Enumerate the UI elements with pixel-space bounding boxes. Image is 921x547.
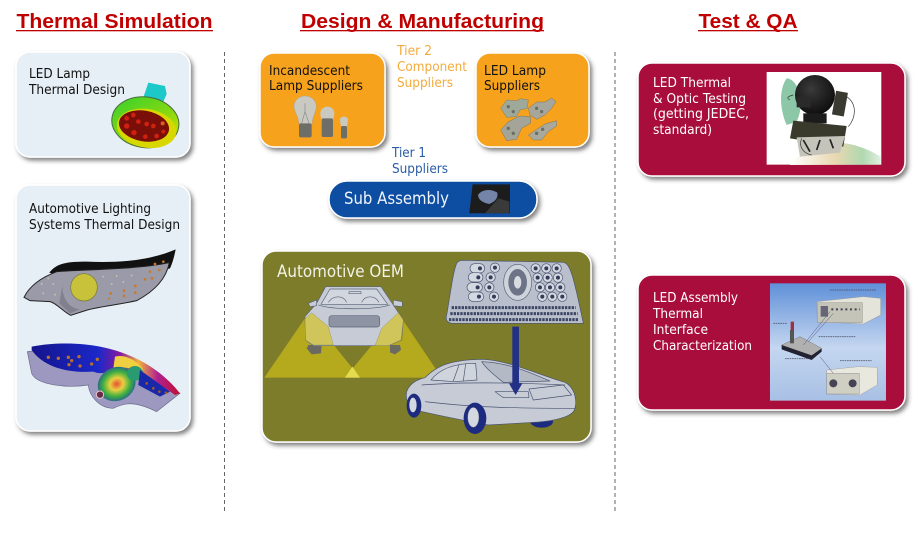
text: LED Assembly Thermal Interface Characterization: Characterization — [653, 339, 752, 354]
photo: integrating sphere test rig — [767, 72, 881, 165]
text: Sub Assembly: Sub Assembly — [344, 189, 449, 209]
label: Tier 2 Component Suppliers: Component — [397, 60, 467, 75]
panel: automotive lighting systems thermal design — [16, 185, 190, 431]
illustration: lamp heat simulation — [27, 344, 180, 412]
text: LED Thermal & Optic Testing: LED Thermal — [653, 76, 731, 91]
label: Tier 1 Suppliers: Suppliers — [392, 162, 448, 177]
text: LED Assembly Thermal Interface Characterization: Interface — [653, 323, 708, 338]
text: LED Thermal & Optic Testing: standard) — [653, 123, 712, 138]
label: Tier 2 Component Suppliers: Tier 2 — [396, 44, 432, 59]
text: Incandescent Lamp Suppliers: Lamp Suppliers — [269, 79, 363, 94]
panel: LED thermal and optic testing — [638, 63, 905, 176]
label: Tier 2 Component Suppliers: Suppliers — [397, 76, 453, 91]
icon: LED lamp thermal model — [108, 83, 182, 153]
panel: LED lamp suppliers — [476, 53, 589, 147]
text: LED Thermal & Optic Testing: (getting JEDEC, — [653, 107, 749, 122]
text: LED Assembly Thermal Interface Characterization — [652, 291, 752, 354]
panel: LED lamp thermal design — [16, 52, 190, 157]
text: LED Thermal & Optic Testing — [653, 76, 749, 138]
text: Automotive Lighting Systems Thermal Design: Automotive Lighting — [29, 202, 151, 217]
label: Tier 2 Component Suppliers — [396, 44, 467, 91]
icon: three incandescent bulbs — [294, 96, 348, 138]
panel: Automotive OEM — [262, 251, 591, 442]
heading: Test & QA: Test & QA — [698, 11, 798, 33]
heading: Design & Manufacturing: Design & Manufacturing — [301, 11, 544, 33]
illustration: headlight beams and front car view — [264, 287, 442, 378]
label: Tier 1 Suppliers — [391, 146, 448, 177]
text: LED Lamp Thermal Design — [28, 67, 125, 98]
panel: Sub Assembly — [329, 181, 537, 218]
photo: thermal interface measurement setup — [770, 283, 886, 401]
text: LED Lamp Suppliers: Suppliers — [484, 79, 540, 94]
illustration: lamp housing model — [24, 249, 176, 315]
label: Tier 1 Suppliers: Tier 1 — [391, 146, 426, 161]
text: Automotive OEM: Automotive OEM — [277, 262, 404, 281]
text: LED Lamp Suppliers — [484, 64, 546, 94]
text: LED Lamp Suppliers: LED Lamp — [484, 64, 546, 79]
text: LED Assembly Thermal Interface Characterization: Thermal — [652, 307, 703, 322]
text: LED Lamp Thermal Design: Thermal Design — [28, 83, 125, 98]
icon: four LED lamps — [501, 98, 557, 141]
text: LED Assembly Thermal Interface Characterization: LED Assembly — [653, 291, 738, 306]
heading: Thermal Simulation: Thermal Simulation — [16, 11, 213, 33]
panel: incandescent lamp suppliers — [260, 53, 385, 147]
illustration: rear car view — [406, 359, 576, 434]
text: LED Thermal & Optic Testing: & Optic Testing — [653, 92, 746, 107]
text: Automotive Lighting Systems Thermal Design: Systems Thermal Design — [29, 218, 180, 233]
panel: LED assembly thermal interface characterization — [638, 275, 905, 410]
text: Incandescent Lamp Suppliers — [269, 64, 363, 94]
text: LED Lamp Thermal Design: LED Lamp — [29, 67, 90, 82]
illustration: LED lamp array — [446, 260, 583, 323]
icon: headlamp photo — [469, 184, 510, 213]
text: Incandescent Lamp Suppliers: Incandescent — [269, 64, 350, 79]
arrow: lamp array to car — [509, 327, 522, 395]
text: Automotive Lighting Systems Thermal Design — [29, 202, 180, 233]
